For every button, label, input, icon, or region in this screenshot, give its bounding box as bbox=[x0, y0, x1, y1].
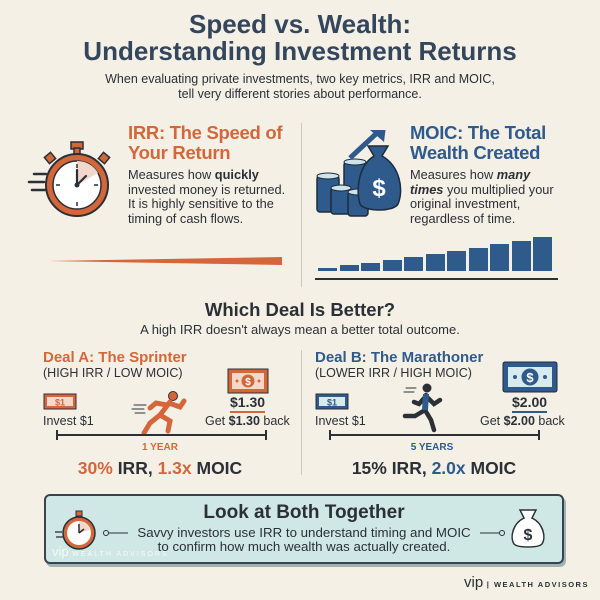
label: invest A: Invest $1 bbox=[43, 414, 94, 428]
text: callout: Savvy investors use IRR to understand timing and MOIC bbox=[137, 525, 471, 540]
label: 5 years: 5 YEARS bbox=[411, 442, 453, 453]
title: Speed vs. Wealth: bbox=[189, 9, 411, 39]
icon: $2.00 bill: $ bbox=[526, 370, 534, 385]
label: 1 year: 1 YEAR bbox=[142, 442, 178, 453]
callout: look at both together bbox=[44, 494, 564, 564]
icon: stopwatch bbox=[28, 141, 111, 217]
divider bbox=[301, 350, 302, 475]
icon: money bag bbox=[511, 509, 545, 548]
subtitle: tell very different stories about performance. bbox=[178, 87, 422, 101]
icon: $1 bill: $1 bbox=[55, 398, 65, 408]
title: Understanding Investment Returns bbox=[83, 36, 517, 66]
label: get back A: Get $1.30 back bbox=[205, 414, 290, 428]
heading: MOIC: Wealth Created bbox=[410, 142, 540, 163]
watermark: vip WEALTH ADVISORS bbox=[52, 544, 169, 559]
heading: Deal B: Deal B: The Marathoner bbox=[315, 349, 483, 366]
heading: MOIC bbox=[410, 122, 546, 163]
icon: $1 bill B bbox=[316, 394, 348, 410]
icon: sprinter bbox=[132, 391, 186, 434]
text: callout: to confirm how much wealth was actually created. bbox=[158, 539, 450, 554]
icon: $1 bill bbox=[44, 394, 76, 410]
text: MOIC description: original investment, bbox=[410, 196, 520, 211]
icon: $1.30 bill bbox=[228, 368, 268, 394]
value: $1.30: $1.30 bbox=[230, 394, 265, 410]
text: IRR description: invested money is returned. bbox=[128, 182, 285, 196]
icon: coins and money bag bbox=[316, 130, 402, 217]
panel: Deal B bbox=[315, 349, 565, 478]
panel: IRR bbox=[28, 122, 285, 265]
label: get back B: Get $2.00 back bbox=[480, 414, 565, 428]
text: MOIC description: times you multiplied your bbox=[410, 182, 554, 196]
text: MOIC description bbox=[410, 167, 554, 226]
icon: $1.30 bill: $ bbox=[245, 377, 251, 388]
result A: 30% IRR, 1.3x MOIC bbox=[78, 458, 242, 478]
heading: IRR: IRR: The Speed of bbox=[128, 122, 282, 143]
timeline A bbox=[56, 430, 267, 440]
connector left bbox=[103, 530, 128, 536]
text: IRR description: timing of cash flows. bbox=[128, 210, 243, 226]
icon: small stopwatch bbox=[55, 510, 96, 550]
footer: logo: vip | WEALTH ADVISORS bbox=[464, 574, 589, 591]
icon: money bag: $ bbox=[524, 527, 533, 544]
icon: $1 bill B: $1 bbox=[327, 398, 337, 408]
subtitle B: (LOWER IRR / HIGH MOIC) bbox=[315, 366, 472, 380]
label: invest B: Invest $1 bbox=[315, 414, 366, 428]
heading: which deal: Which Deal Is Better? bbox=[205, 299, 395, 320]
text: IRR description: It is highly sensitive to the bbox=[128, 196, 274, 211]
icon: coins and money bag: $ bbox=[372, 175, 386, 202]
heading: IRR: Your Return bbox=[128, 142, 230, 163]
panel: Deal A bbox=[43, 349, 290, 478]
icon: marathoner bbox=[402, 384, 442, 432]
value: $2.00: $2.00 bbox=[512, 394, 547, 410]
subheading: A high IRR doesn't always mean a better total outcome. bbox=[140, 322, 460, 337]
heading: Deal A: Deal A: The Sprinter bbox=[43, 349, 187, 366]
text: IRR description: Measures how quickly bbox=[128, 167, 259, 182]
text: MOIC description: Measures how many bbox=[410, 167, 530, 182]
connector right bbox=[480, 530, 505, 536]
icon: $2.00 bill bbox=[502, 362, 558, 392]
subtitle A: (HIGH IRR / LOW MOIC) bbox=[43, 366, 183, 380]
heading: callout: Look at Both Together bbox=[203, 502, 405, 523]
subtitle: When evaluating private investments, two key metrics, IRR and MOIC, bbox=[105, 72, 495, 86]
text: IRR description bbox=[128, 167, 285, 226]
text: callout bbox=[137, 525, 471, 554]
timeline B bbox=[329, 430, 540, 440]
speed line bbox=[50, 257, 282, 265]
heading: MOIC: MOIC: The Total bbox=[410, 122, 546, 143]
divider bbox=[301, 123, 302, 287]
subtitle bbox=[105, 72, 495, 101]
heading: IRR bbox=[128, 122, 283, 163]
panel: MOIC bbox=[316, 122, 554, 226]
title bbox=[83, 9, 517, 66]
bar chart: growth bbox=[315, 237, 558, 280]
result B: 15% IRR, 2.0x MOIC bbox=[352, 458, 516, 478]
text: MOIC description: regardless of time. bbox=[410, 210, 515, 226]
